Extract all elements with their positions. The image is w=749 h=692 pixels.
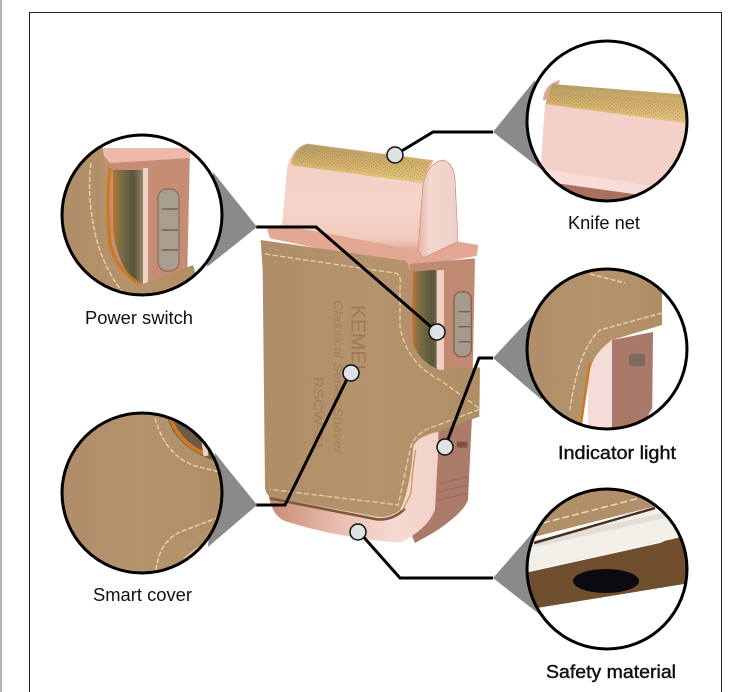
pointer wedge: indicator light	[493, 313, 542, 400]
pointer wedge: power switch	[207, 172, 257, 267]
knife net gold foil	[291, 144, 434, 183]
leather shadow edge	[270, 498, 405, 519]
callout connector: indicator light	[445, 358, 493, 447]
model emboss: RSCW-S1	[311, 377, 325, 450]
inset: indicator light	[525, 267, 690, 432]
callout connector: knife net	[395, 132, 493, 155]
pointer wedge: safety material	[493, 530, 543, 617]
orange inner edge	[403, 450, 416, 510]
shaver head side face	[418, 160, 458, 258]
callout connector: safety material	[360, 533, 493, 578]
shaver head body	[282, 143, 433, 250]
lower body side	[407, 417, 472, 543]
pointer wedge: smart cover	[208, 453, 257, 547]
base rim	[267, 225, 478, 267]
tagline emboss: Classical Series Shaver	[331, 300, 345, 455]
leather cover	[261, 240, 480, 517]
callout connector: power switch	[256, 227, 437, 332]
inset: safety material	[525, 487, 690, 652]
label: smart cover: Smart cover	[93, 585, 192, 605]
label: knife net: Knife net	[568, 213, 640, 233]
inset: knife net	[525, 39, 690, 205]
left edge strip	[0, 0, 2, 692]
chrome window	[412, 269, 444, 372]
indicator slot	[457, 442, 467, 448]
label: indicator light: Indicator light	[558, 443, 676, 463]
switch housing	[409, 258, 475, 373]
slider ridges	[458, 312, 470, 342]
logo emboss: KEMEI	[347, 305, 370, 370]
label: safety material: Safety material	[546, 662, 676, 682]
power slider	[454, 292, 471, 357]
pointer wedge: knife net	[493, 80, 542, 170]
cover stitching	[265, 254, 479, 505]
shaver product illustration	[261, 143, 480, 543]
inset: power switch	[60, 133, 225, 300]
inset: smart cover	[60, 411, 225, 576]
callout connector: smart cover	[256, 373, 350, 505]
anchor dots	[343, 147, 453, 540]
label: power switch: Power switch	[85, 308, 193, 328]
rose gold bottom shell	[268, 425, 439, 543]
window highlight	[437, 270, 444, 370]
